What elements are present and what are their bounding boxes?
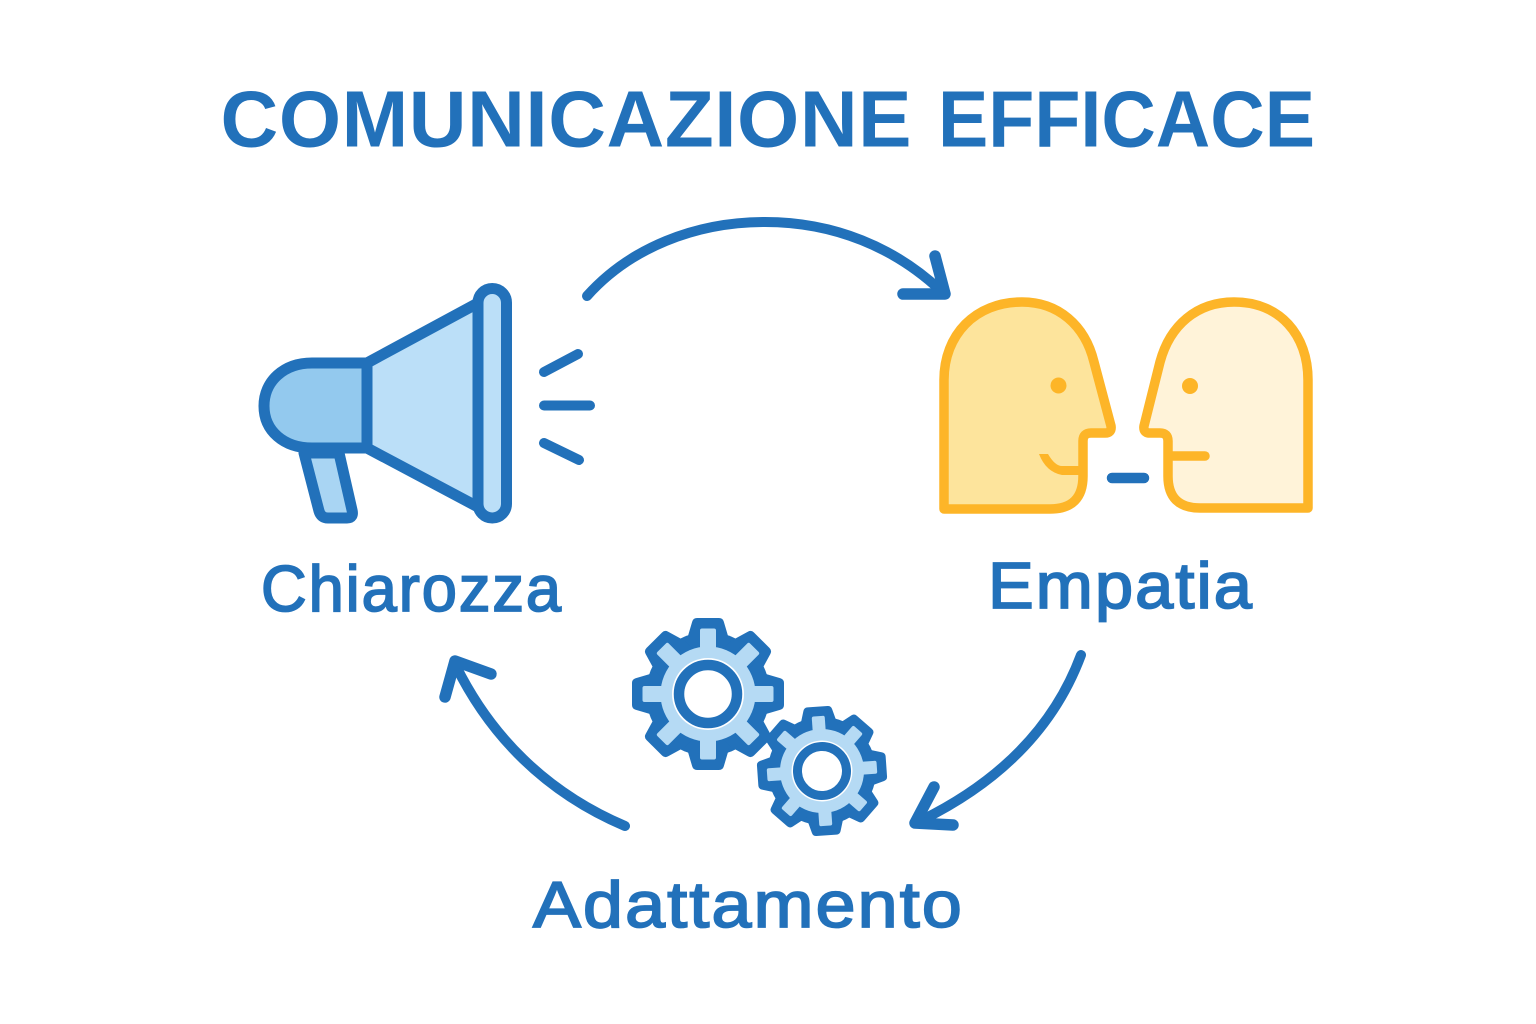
title: COMUNICAZIONE [220, 74, 912, 164]
megaphone body [264, 363, 367, 448]
left head eye [1050, 378, 1066, 394]
megaphone handle [304, 453, 352, 518]
megaphone rim [478, 288, 506, 518]
left head mouth [1039, 454, 1082, 475]
icon: megaphone [264, 288, 506, 518]
dash between heads [1112, 473, 1144, 483]
megaphone cone [367, 303, 478, 507]
arrow: adattamento to chiarezza [445, 661, 625, 826]
right head outline [1144, 302, 1308, 508]
title [220, 74, 1315, 164]
right head eye [1182, 378, 1198, 394]
icon: sound waves [544, 354, 590, 460]
label: Chiarozza: Chiarozza [261, 552, 563, 625]
icon: right head [1144, 302, 1308, 508]
arrow: chiarezza to empatia [587, 222, 945, 296]
title: EFFICACE [938, 74, 1315, 164]
label: Empatia: Empatia [988, 549, 1254, 622]
icon: left head [944, 302, 1111, 509]
arrow: empatia to adattamento [915, 655, 1081, 825]
icon: small gear [758, 707, 886, 835]
left head outline [944, 302, 1111, 509]
right head mouth [1170, 451, 1205, 461]
icon: large gear [637, 623, 779, 765]
label: Adattamento: Adattamento [533, 868, 964, 941]
